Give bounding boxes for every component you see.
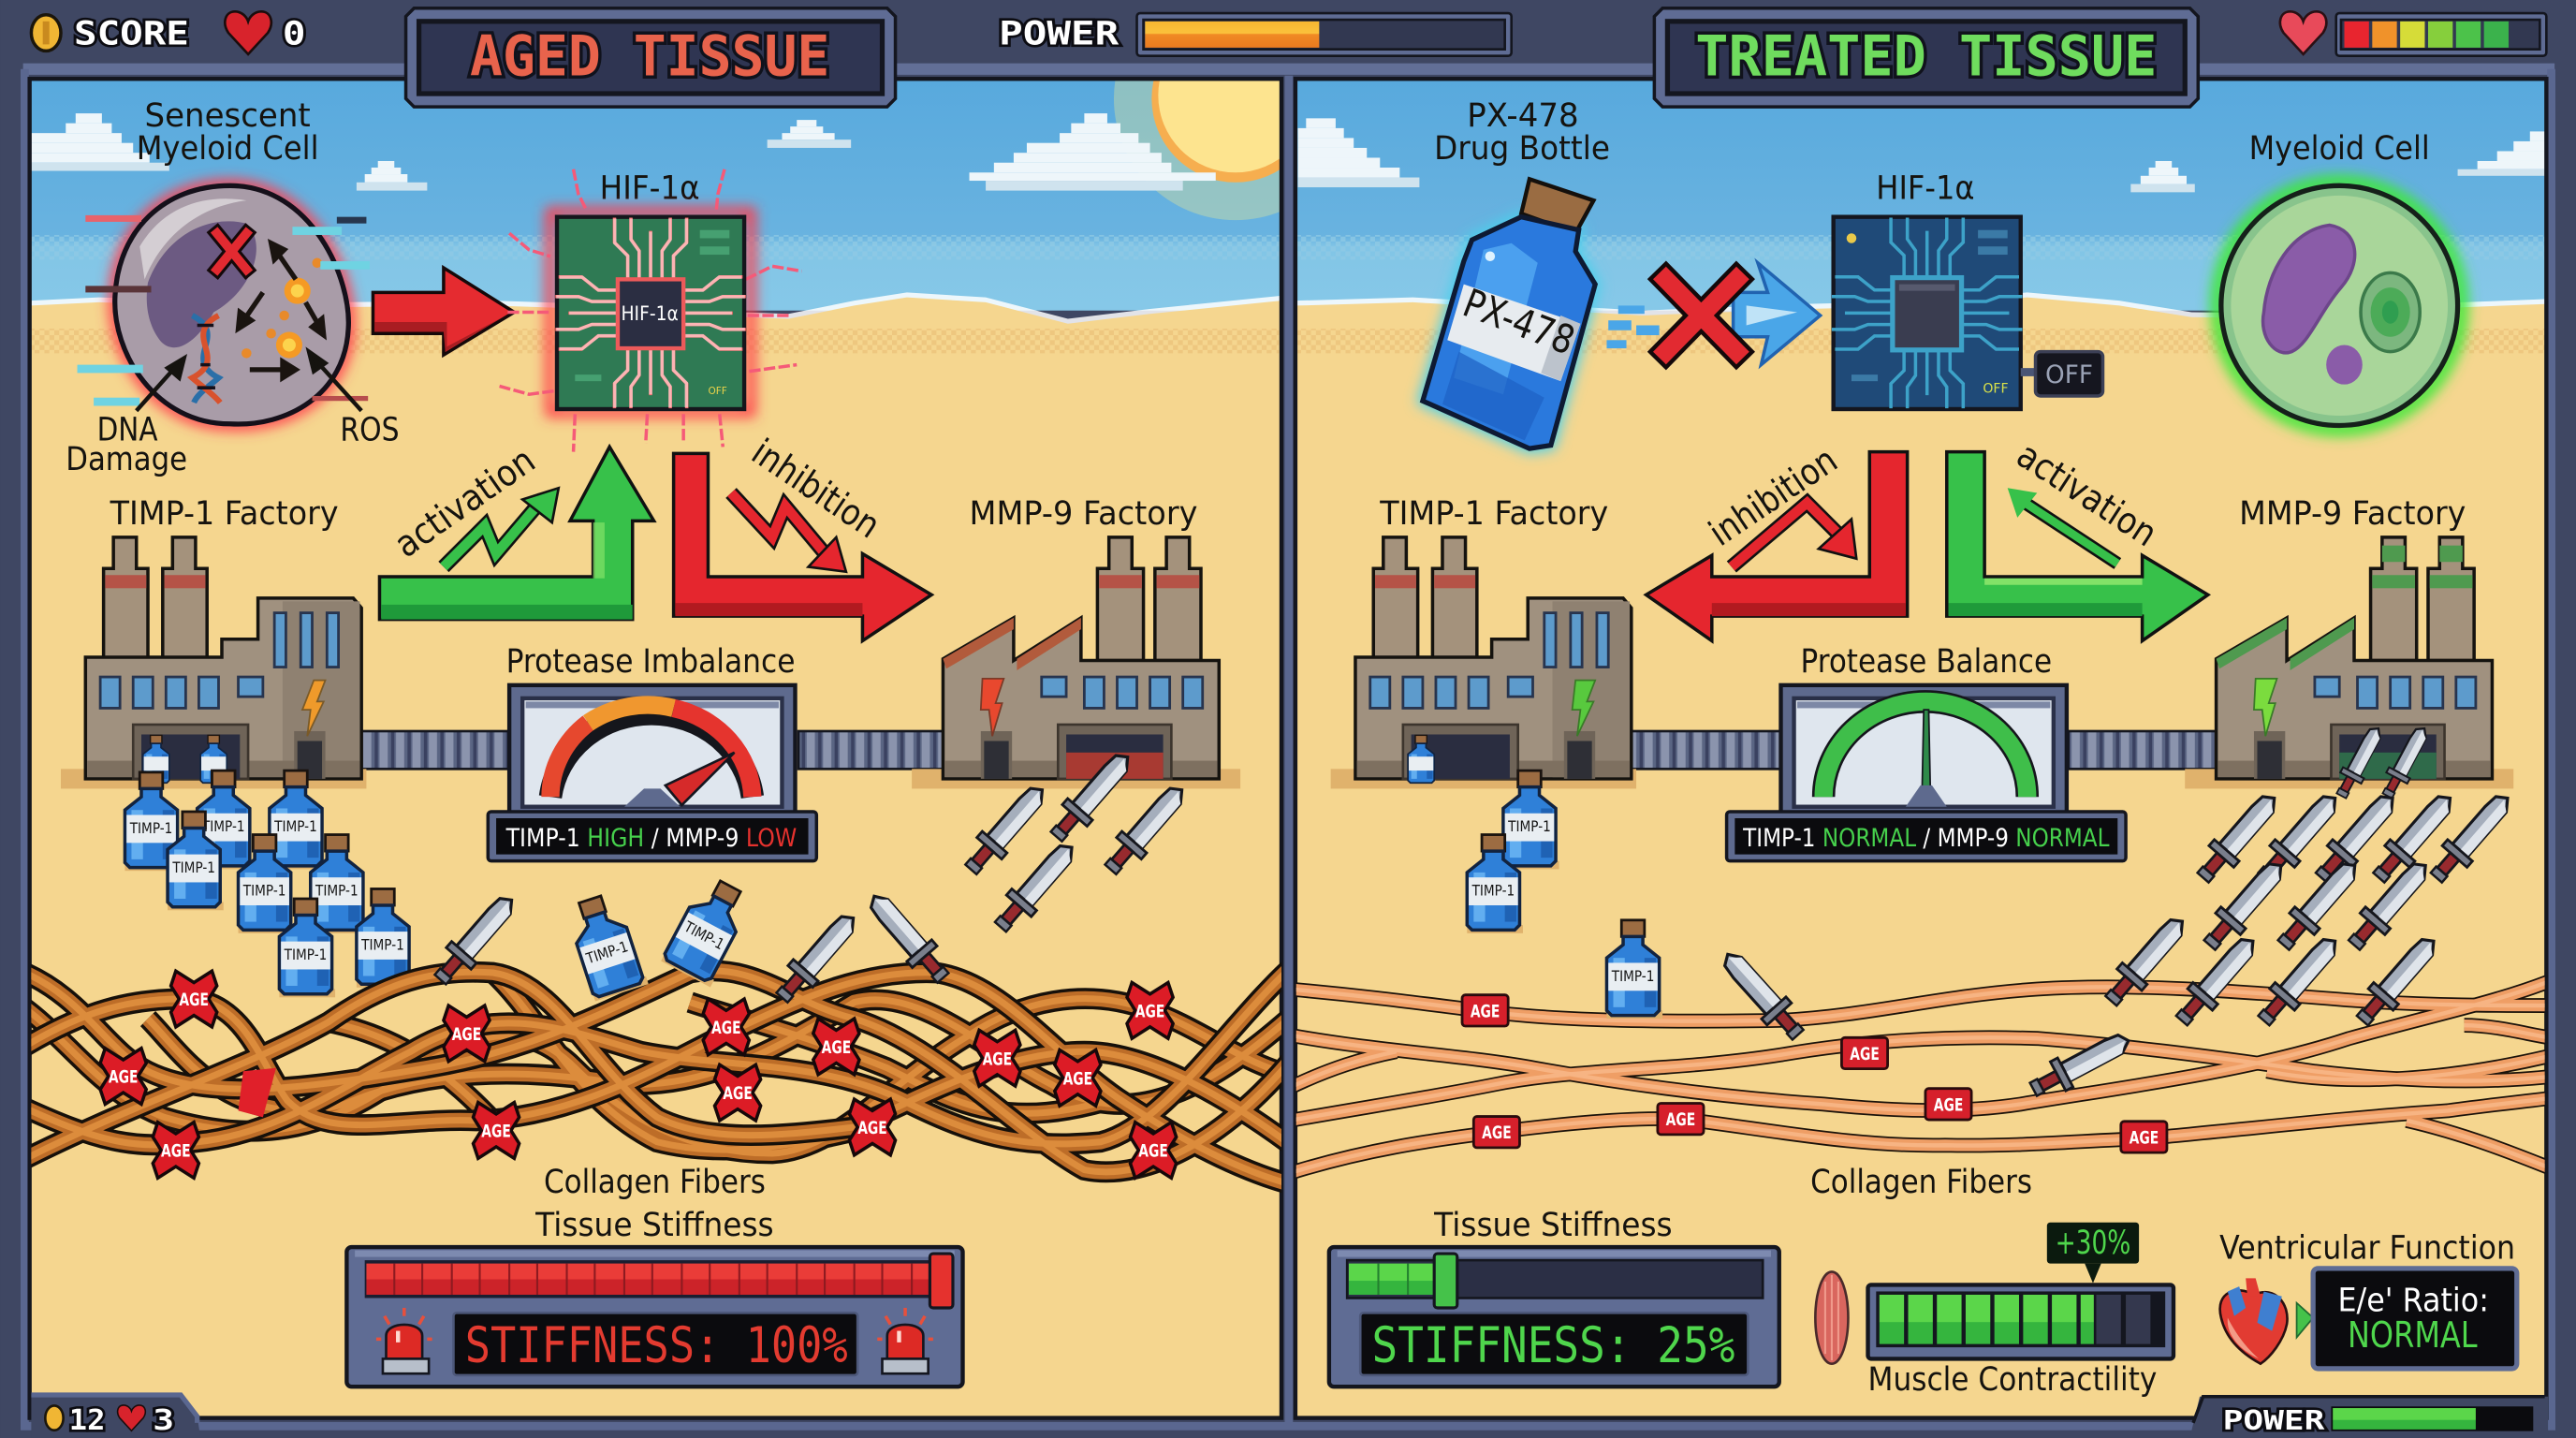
label: inhibition right: inhibition bbox=[1702, 439, 1845, 555]
icon: senescent cell bbox=[78, 185, 370, 424]
icon: inactive HIF chip: OFF bbox=[1983, 381, 2009, 396]
HUD: power bar bbox=[999, 13, 1512, 56]
label: protease imbalance: Protease Imbalance bbox=[506, 642, 795, 681]
muscle contractility bar bbox=[1868, 1284, 2174, 1358]
swords in MMP-9 factory bbox=[2331, 723, 2434, 801]
label: DNA damage: Damage bbox=[66, 440, 187, 478]
icon: heart bbox=[225, 11, 271, 54]
icon: alarm left bbox=[376, 1308, 432, 1373]
icon: active HIF chip bbox=[500, 169, 802, 452]
icon: active HIF chip: HIF-1α bbox=[621, 301, 679, 325]
MMP-9 factory aged bbox=[912, 537, 1240, 788]
AGE crosslinks: AGE bbox=[109, 1068, 138, 1088]
readout: TIMP-1 normal MMP-9 normal bbox=[1727, 812, 2126, 861]
OFF switch: OFF bbox=[2045, 361, 2093, 389]
label: senescent myeloid cell: Senescent bbox=[145, 96, 311, 135]
readout: E/e ratio: E/e' Ratio: bbox=[2337, 1282, 2489, 1320]
label: TIMP-1 factory treated: TIMP-1 Factory bbox=[1379, 494, 1608, 533]
HUD: bottom right power: POWER bbox=[2223, 1405, 2325, 1436]
AGE tags treated: AGE bbox=[1471, 1002, 1500, 1021]
icon: inactive HIF chip bbox=[1832, 217, 2022, 409]
label: muscle contractility: Muscle Contractility bbox=[1868, 1360, 2157, 1399]
AGE crosslinks: AGE bbox=[822, 1038, 851, 1058]
AGE crosslinks: AGE bbox=[481, 1122, 511, 1141]
bottles: TIMP-1 aged: TIMP-1 bbox=[129, 819, 172, 837]
label: protease balance: Protease Balance bbox=[1801, 642, 2052, 681]
MMP-9 factory treated bbox=[2185, 537, 2513, 788]
heading: aged tissue bbox=[406, 8, 896, 107]
label: DNA damage: DNA bbox=[97, 410, 158, 448]
TIMP-1 factory aged bbox=[61, 537, 366, 788]
items on fibers aged: TIMP-1 bbox=[681, 917, 727, 953]
callout lines bbox=[137, 352, 361, 411]
swords: MMP-9 aged bbox=[959, 745, 1193, 938]
bottles: TIMP-1 aged: TIMP-1 bbox=[360, 935, 404, 953]
label: PX-478 drug bottle: Drug Bottle bbox=[1434, 129, 1610, 168]
AGE crosslinks: AGE bbox=[983, 1049, 1012, 1069]
AGE crosslinks: AGE bbox=[1135, 1002, 1164, 1021]
gauge: protease imbalance bbox=[509, 685, 795, 814]
icon: alarm right bbox=[877, 1308, 933, 1373]
readout: TIMP-1 normal MMP-9 normal: TIMP-1 NORMAL / MMP-9 NORMAL bbox=[1742, 825, 2110, 853]
stiffness panel treated bbox=[1329, 1247, 1779, 1387]
HUD: score bbox=[31, 11, 305, 54]
stiffness panel treated: STIFFNESS: 25% bbox=[1372, 1317, 1734, 1374]
clouds bbox=[31, 113, 1216, 191]
label: tissue stiffness treated: Tissue Stiffness bbox=[1433, 1206, 1673, 1244]
icon: coin bbox=[31, 15, 61, 51]
label: collagen fibers treated: Collagen Fibers bbox=[1810, 1163, 2032, 1201]
callout: +30% bbox=[2047, 1223, 2139, 1284]
readout: TIMP-1 high MMP-9 low: TIMP-1 HIGH / MMP-9 LOW bbox=[505, 825, 797, 853]
clouds bbox=[1298, 118, 2545, 192]
label: PX-478 drug bottle: PX-478 bbox=[1467, 96, 1579, 135]
AGE crosslinks: AGE bbox=[723, 1084, 753, 1104]
sun bbox=[1114, 81, 1280, 221]
readout: E/e ratio: NORMAL bbox=[2348, 1314, 2478, 1357]
heading: treated tissue: TREATED TISSUE bbox=[1695, 25, 2157, 90]
HUD: bottom left stats: 3 bbox=[153, 1404, 174, 1437]
AGE tags treated: AGE bbox=[1666, 1110, 1695, 1130]
stiffness panel aged: STIFFNESS: 100% bbox=[465, 1317, 848, 1374]
icon: active HIF chip: OFF bbox=[708, 386, 727, 397]
TIMP-1 factory treated bbox=[1331, 537, 1636, 788]
bottles: TIMP-1 aged: TIMP-1 bbox=[242, 881, 285, 899]
AGE crosslinks bbox=[100, 971, 1177, 1178]
label: activation right: activation bbox=[2009, 434, 2164, 555]
label: ventricular function: Ventricular Function bbox=[2219, 1228, 2515, 1267]
arrow: blocked drug signal bbox=[1606, 263, 1821, 365]
items on fibers aged: TIMP-1 bbox=[583, 937, 630, 968]
items on fibers treated bbox=[1606, 909, 2445, 1104]
activation trend arrow bbox=[444, 488, 559, 566]
bottles: TIMP-1 aged bbox=[124, 770, 413, 997]
collagen fibers normal bbox=[1290, 979, 2554, 1173]
icon: muscle bbox=[1815, 1271, 1848, 1364]
bottles: TIMP-1 aged: TIMP-1 bbox=[284, 946, 327, 963]
bottles: TIMP-1 aged: TIMP-1 bbox=[201, 817, 245, 835]
activation line arrow right bbox=[2008, 488, 2117, 564]
bottles: TIMP-1 aged: TIMP-1 bbox=[315, 881, 359, 899]
label: myeloid cell: Myeloid Cell bbox=[2249, 129, 2430, 168]
inhibition trend arrow right bbox=[1732, 503, 1856, 566]
label: PX-478 drug bottle bbox=[1434, 96, 1610, 168]
callout: +30%: +30% bbox=[2056, 1224, 2130, 1262]
label: collagen fibers aged: Collagen Fibers bbox=[544, 1163, 766, 1201]
heading: treated tissue bbox=[1654, 8, 2198, 107]
label: senescent myeloid cell bbox=[137, 96, 319, 168]
bottles: TIMP-1 treated bbox=[1467, 770, 1559, 933]
label: tissue stiffness aged: Tissue Stiffness bbox=[534, 1206, 774, 1244]
AGE crosslinks: AGE bbox=[452, 1025, 481, 1045]
collagen fibers tangled bbox=[17, 961, 1298, 1186]
AGE crosslinks: AGE bbox=[161, 1142, 191, 1162]
damage glitches bbox=[78, 215, 370, 405]
AGE tags treated bbox=[1462, 995, 2167, 1152]
pipes right bbox=[1630, 731, 2217, 769]
HUD: bottom right power bbox=[2190, 1397, 2548, 1438]
AGE crosslinks: AGE bbox=[857, 1119, 887, 1138]
ROS sparks bbox=[242, 258, 322, 359]
label: ROS: ROS bbox=[340, 410, 400, 448]
arrow: activation of TIMP-1 bbox=[379, 447, 654, 620]
icon: healthy cell bbox=[2217, 183, 2461, 429]
HUD: power bar: POWER bbox=[999, 14, 1120, 52]
items on fibers aged bbox=[428, 873, 956, 1008]
AGE crosslinks: AGE bbox=[1063, 1069, 1092, 1089]
heading: aged tissue: AGED TISSUE bbox=[470, 25, 829, 90]
bottles: TIMP-1 aged: TIMP-1 bbox=[171, 858, 215, 876]
bottles: TIMP-1 treated: TIMP-1 bbox=[1507, 817, 1551, 835]
inhibition trend arrow bbox=[731, 493, 846, 572]
items on fibers treated: TIMP-1 bbox=[1611, 967, 1654, 985]
label: senescent myeloid cell: Myeloid Cell bbox=[137, 129, 319, 168]
AGE crosslinks: AGE bbox=[711, 1019, 741, 1038]
panel: treated tissue scene bbox=[1296, 81, 2546, 1430]
readout: TIMP-1 high MMP-9 low bbox=[488, 812, 816, 861]
icon: PX-478 bottle: PX-478 bbox=[1457, 280, 1581, 364]
readout: E/e ratio bbox=[2313, 1269, 2517, 1369]
score value: 0 bbox=[283, 14, 305, 52]
bottles: TIMP-1 treated: TIMP-1 bbox=[1471, 881, 1515, 899]
arrow: inhibition of TIMP-1 bbox=[1647, 452, 1908, 640]
red X bbox=[1666, 279, 1736, 352]
HUD: health bar bbox=[2280, 11, 2546, 56]
arrow: activation of MMP-9 bbox=[1947, 452, 2208, 640]
label: activation: activation bbox=[387, 439, 543, 566]
label: TIMP-1 factory: TIMP-1 Factory bbox=[110, 494, 339, 533]
HUD: bottom left stats bbox=[31, 1395, 200, 1438]
gauge: protease balance bbox=[1781, 685, 2067, 814]
label: MMP-9 factory treated: MMP-9 Factory bbox=[2239, 494, 2466, 533]
AGE crosslinks: AGE bbox=[179, 990, 209, 1010]
icon: PX-478 bottle bbox=[1423, 179, 1595, 448]
bottles: TIMP-1 aged: TIMP-1 bbox=[273, 817, 317, 835]
label: MMP-9 factory: MMP-9 Factory bbox=[970, 494, 1197, 533]
label: HIF-1a aged: HIF-1α bbox=[600, 169, 700, 207]
panel: aged tissue scene bbox=[32, 81, 1280, 1416]
AGE tags treated: AGE bbox=[1850, 1045, 1880, 1064]
score label: SCORE bbox=[74, 14, 189, 52]
arrow: inhibition of MMP-9 bbox=[674, 453, 931, 640]
red X bbox=[217, 233, 246, 270]
DNA helix bbox=[192, 315, 220, 403]
AGE tags treated: AGE bbox=[2130, 1128, 2159, 1148]
AGE tags treated: AGE bbox=[1934, 1095, 1963, 1115]
swords: MMP-9 treated bbox=[2190, 786, 2519, 956]
pipes left bbox=[359, 731, 946, 769]
label: inhibition: inhibition bbox=[744, 432, 887, 547]
OFF switch bbox=[2021, 352, 2102, 396]
arrow: heart to ratio bbox=[2297, 1303, 2313, 1338]
AGE crosslinks: AGE bbox=[1138, 1142, 1168, 1162]
AGE tags treated: AGE bbox=[1482, 1123, 1512, 1143]
label: DNA damage bbox=[66, 410, 187, 478]
arrow: cell to HIF bbox=[373, 268, 514, 355]
HUD: bottom left stats: 12 bbox=[69, 1404, 105, 1437]
icon: heart organ bbox=[2220, 1278, 2288, 1364]
stiffness panel aged bbox=[346, 1247, 963, 1387]
stress arrows bbox=[239, 243, 324, 378]
label: HIF-1a treated: HIF-1α bbox=[1876, 169, 1975, 207]
